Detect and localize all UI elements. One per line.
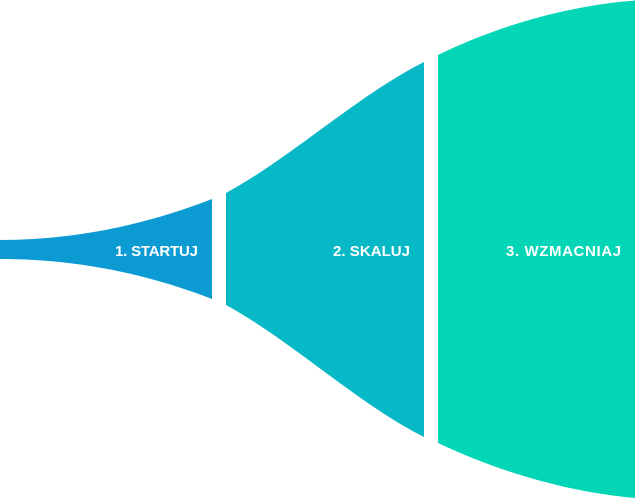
stage 1: startuj [0,199,212,299]
label: 3. wzmacniaj: 3. WZMACNIAJ [506,243,621,260]
label: 2. skaluj: 2. SKALUJ [333,243,410,260]
label: 1. startuj: 1. STARTUJ [115,243,198,260]
stage 2: skaluj [226,62,424,437]
